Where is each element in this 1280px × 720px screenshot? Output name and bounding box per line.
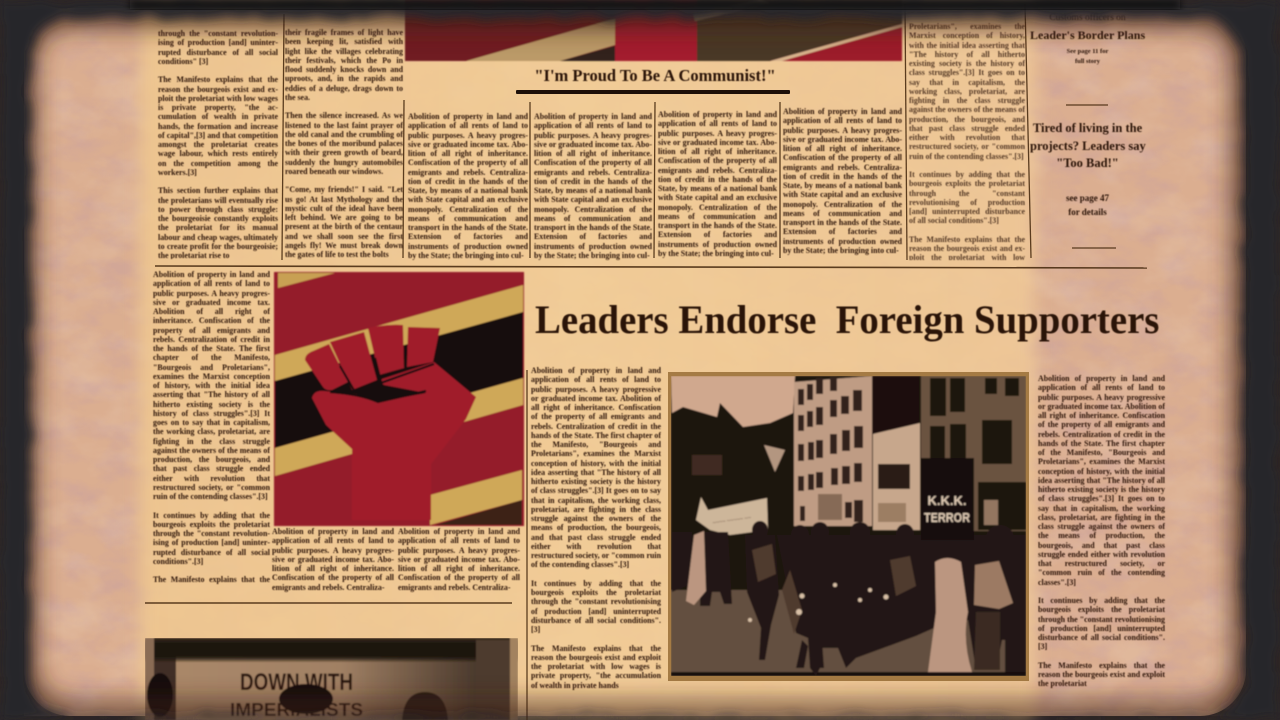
sidebar: teasers: see page 47 [1066,193,1109,203]
column: top 1: through the "constant revolution­ising of production [and] uninter­rupted disturbance of all social conditions" [3] [158,29,278,66]
sidebar: teasers: for details [1068,207,1107,217]
column: top 1: This section further explains that the proletarians will eventually rise to power through class strug­gle: the bourgeoisie constantly ex­ploits the proletariat for its manual labour and cheap wages, ultimately to create profit for the bourgeoisie; the proletariat rise to [158,186,278,259]
top banner image [405,0,902,61]
column: article right: Abolition of property in land and application of all rents of land to public purposes. A heavy progres­sive or graduated income tax. Abo­lition of all right of inheritance. Confiscation of the property of all emigrants and rebels. Centraliza­tion of credit in the hands of the State. The first chapter of the Mani­festo, "Bourgeois and Proletari­ans", examines the Marxist con­ception of history, with the initial idea asserting that "The history of all hitherto existing society is the history of class struggles".[3] It goes on to say that in capitalism, the working class, proletariat, are fighting in the class struggle against the owners of the means of production, the bourgeois, and that past class struggle ended either with revolution that restruc­tured society, or "common ruin of the contending classes".[3] [1038,374,1165,586]
sidebar: teasers: Tired of living in the [1033,121,1142,135]
column: article left: It continues by adding that the bourgeois exploits the proletariat through the "constant revolution­ising of production [and] uninter­rupted disturbance of all social conditions".[3] [531,579,661,634]
right buildings [921,376,1026,531]
marchers in pale dresses [686,531,1013,672]
light building [794,376,872,526]
column: under poster right: Abolition of property in land and application of all rents of land to public purposes. A heavy progres­sive or graduated income tax. Abo­lition of all right of inheritance. Confiscation of the property of all emigrants and rebels. Centraliza- [398,527,520,592]
column: article right: The Manifesto explains that the reason the bourgeois exist and ex­ploit the proletariat [1038,661,1165,688]
sidebar: teasers [1030,13,1146,217]
news photo: march with K.K.K. Terror sign [668,372,1029,681]
newspaper page [140,0,1035,720]
headline underline bar [516,90,790,94]
column rules [145,4,1147,720]
column: top right: It continues by adding that the bour­geois exploits the proletariat through the "constant revolutionising of pro­duction [and] uninterrupted distur­bance of all social conditions".[3] [909,170,1025,225]
column: top 1 [157,29,278,260]
bottom photo: down with: DOWN WITH [240,669,353,696]
sidebar: teasers: See page 11 for [1067,48,1108,55]
column: top 2: "Come, my friends!" I said. "Let us go! At last Mythology and the mystic cult of the ideal have been left behind. We are going to be present at the birth of the centaur and we shall soon see the first angels fly! We must break down the gates of life to test the bolts [285,185,403,259]
column: article left: Abolition of property in land and application of all rents of land to public purposes. A heavy progres­sive or graduated income tax. Abo­lition of all right of inheritance. Confiscation of the property of all emigrants and rebels. Centraliza­tion of credit in the hands of the State. The first chapter of the Mani­festo, "Bourgeois and Proletari­ans", examines the Marxist con­ception of history, with the initial idea asserting that "The history of all hitherto existing society is the history of class struggles".[3] It goes on to say that in capitalism, the working class, proletariat, are fighting in the class struggle against the owners of the means of production, the bourgeois, and that past class struggle ended either with revolution that restructured society, or "common ruin of the contending classes".[3] [531,366,661,569]
column: article right: It continues by adding that the bourgeois exploits the proletariat through the "constant revolution­ising of production [and] uninter­rupted disturbance of all social conditions".[3] [1038,596,1165,651]
sidebar: teasers: full story [1075,58,1100,65]
rules and images layer [145,0,1147,720]
heading: I'm Proud To Be A Communist: "I'm Proud To Be A Communist!" [534,66,776,85]
sidebar: teasers: Customs officers on [1049,13,1126,23]
column: beside poster: Abolition of property in land and application of all rents of land to public purposes. A heavy progres­sive or graduated income tax. Abo­lition of all right of inheritance. Confiscation of the property of all emigrants and rebels. Centraliza­tion of credit in the hands of the State. The first chapter of the Mani­festo, "Bourgeois and Proletari­ans", examines the Marxist con­ception of history, with the initial idea asserting that "The history of all hitherto existing society is the history of class struggles".[3] It goes on to say that in capitalism, the working class, proletariat, are fighting in the class struggle against the owners of the means of production, the bourgeois, and that past class struggle ended either with revolution that restruc­tured society, or "common ruin of the contending classes".[3] [153,270,270,501]
column: top right [908,22,1026,261]
news photo: march with K.K.K. Terror sign: TERROR [924,510,971,525]
sidebar: teasers: Leader's Border Plans [1030,28,1145,42]
ground [671,590,1026,676]
column: centre 1: Abolition of property in land and application of all rents of land to public purposes. A heavy progres­sive or graduated income tax. Abo­lition of all right of inheritance. Confiscation of the property of all emigrants and rebels. Centraliza­tion of credit in the hands of the State, by means of a national bank with State capital and an ex­clusive monopoly. Centralization of the means of communication and transport in the hands of the State. Extension of factories and instruments of production owned by the State; the bringing into cul- [408,112,528,260]
news photo: march with K.K.K. Terror sign: ~~~~ ~~~~~ ~~ [712,515,752,527]
bottom photo: down with: IMPERIALISTS [230,700,363,720]
left building details [692,455,722,475]
column: under poster left: Abolition of property in land and application of all rents of land to public purposes. A heavy progres­sive or graduated income tax. Abo­lition of all right of inheritance. Confiscation of the property of all emigrants and rebels. Centraliza- [272,527,394,592]
column: centre 2: Abolition of property in land and application of all rents of land to public purposes. A heavy progres­sive or graduated income tax. Abo­lition of all right of inheritance. Confiscation of the property of all emigrants and rebels. Centraliza­tion of credit in the hands of the State, by means of a national bank with State capital and an ex­clusive monopoly. Centralization of the means of communication and transport in the hands of the State. Extension of factories and instruments of production owned by the State; the bringing into cul- [534,112,652,260]
coats highlights [752,544,916,634]
bottom photo: down with [145,638,518,720]
heading: Leaders Endorse Foreign Supporters: Leaders Endorse Foreign Supporters [535,297,1159,342]
column: article left: The Manifesto explains that the reason the bourgeois exist and exploit the proletariat with low wages is private property, "the accumulation of wealth in private hands [531,644,661,690]
column: centre 4: Abolition of property in land and application of all rents of land to public purposes. A heavy progres­sive or graduated income tax. Abo­lition of all right of inheritance. Confiscation of the property of all emigrants and rebels. Centraliza­tion of credit in the hands of the State, by means of a national bank with State capital and an ex­clusive monopoly. Centralization of the means of communication and transport in the hands of the State. Extension of factories and instruments of production owned by the State; the bringing into cul- [783,107,902,255]
dark upper block and pale shop [872,376,919,434]
column: centre 3: Abolition of property in land and application of all rents of land to public purposes. A heavy progres­sive or graduated income tax. Abo­lition of all right of inheritance. Confiscation of the property of all emigrants and rebels. Centraliza­tion of credit in the hands of the State, by means of a national bank with State capital and an ex­clusive monopoly. Centralization of the means of communication and transport in the hands of the State. Extension of factories and instruments of production owned by the State; the bringing into cul- [658,110,777,258]
sidebar: teasers: projects? Leaders say [1030,138,1146,152]
column: beside poster: It continues by adding that the bourgeois exploits the proletariat through the "constant revolution­ising of production [and] uninter­rupted disturbance of all social conditions".[3] [153,510,270,566]
column: article right [1037,374,1166,689]
crowd [672,521,1026,676]
column: top 1: The Manifesto explains that the reason the bourgeois exist and ex­ploit the proletariat with low wages is private property, "the ac­cumulation of wealth in private hands, the formation and increase of capital",[3] and that competi­tion amongst the proletariat cre­ates wage labour, which rests en­tirely on the competition among the workers.[3] [158,75,278,177]
column: top 2: Then the silence increased. As we listened to the last faint prayer of the old canal and the crumbling of the bones of the moribund palaces with their green growth of beard, suddenly the hungry automobiles roared beneath our windows. [285,111,403,176]
column: top right: Proletarians", examines the Marxist conception of history, with the initial idea asserting that "The history of all hitherto existing society is the history of class strug­gles".[3] It goes on to say that in capitalism, the working class, prole­tariat, are fighting in the class strug­gle against the owners of the means of production, the bourgeois, and that past class struggle ended either with revolution that restructured so­ciety, or "common ruin of the con­tending classes".[3] [909,22,1025,160]
column: top 2: their fragile frames of light have been keeping lit, satisfied with light like the villages celebrating their festivals, which the Po in flood suddenly knocks down and uproots, and, in the rapids and eddies of a deluge, drags down to the sea. [285,28,403,102]
sidebar: teasers: "Too Bad!" [1056,156,1119,170]
banner [696,497,768,535]
icon: raised fist [305,325,476,520]
red fist poster [274,272,524,526]
news photo: march with K.K.K. Terror sign: K.K.K. [928,493,966,508]
column: top 2 [284,28,404,260]
sky [671,376,795,427]
column: article left [530,366,662,691]
K.K.K. Terror sign [921,458,974,540]
